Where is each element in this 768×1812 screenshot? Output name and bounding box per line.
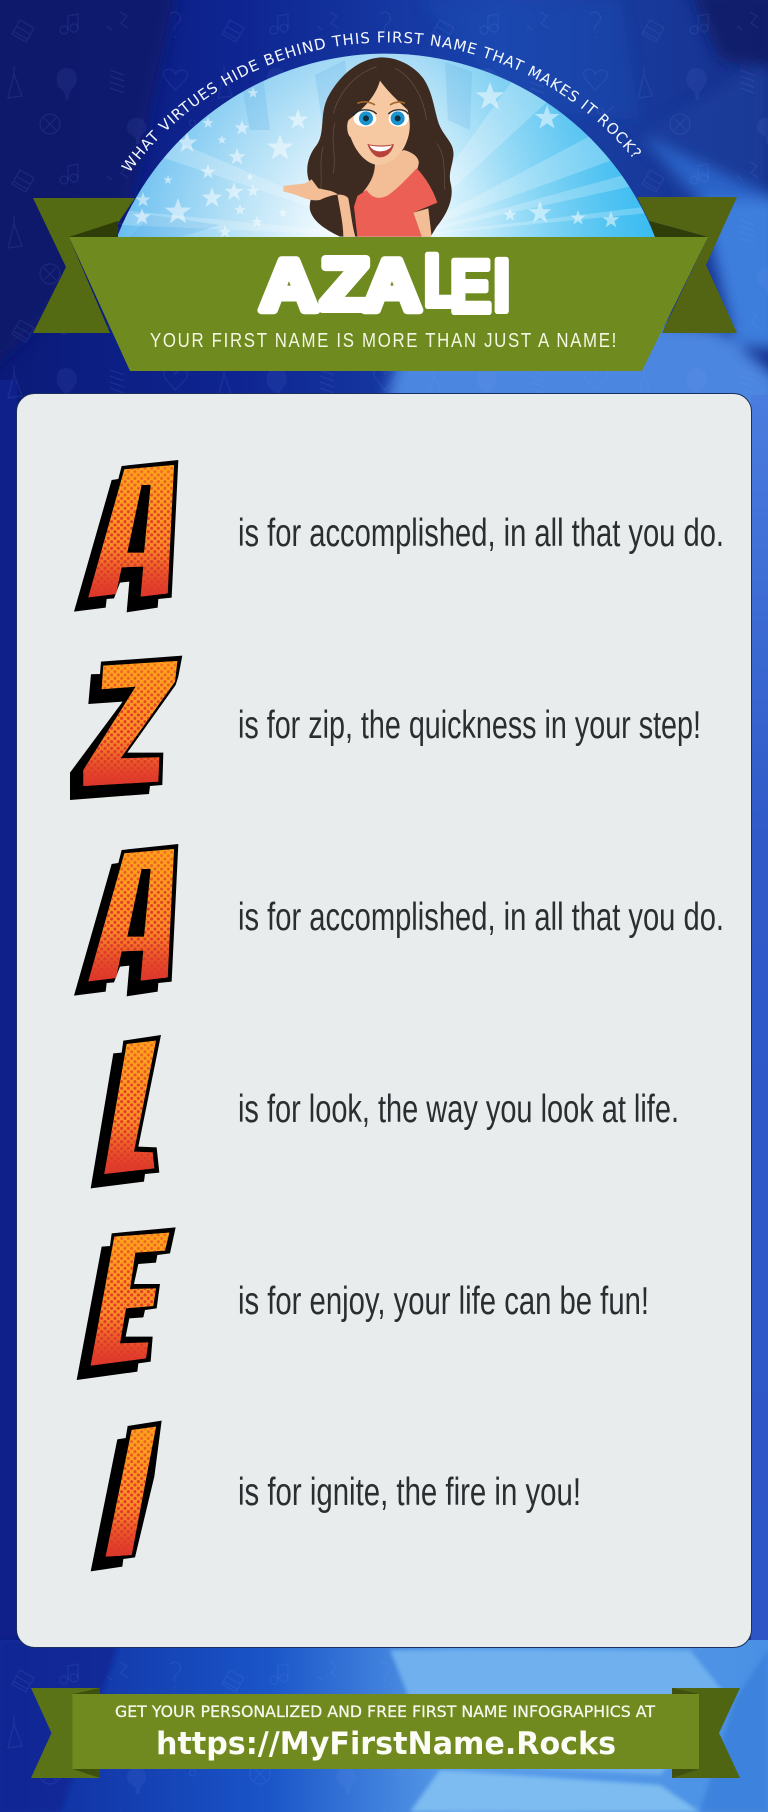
- name title: AZA: [260, 245, 421, 326]
- footer ribbon: [31, 1688, 740, 1778]
- footer url: https://MyFirstName.Rocks: [156, 1726, 616, 1762]
- arms: [283, 179, 355, 237]
- row A: accomplished: [74, 460, 724, 612]
- row I: ignite: [91, 1421, 581, 1571]
- right tail: [672, 1688, 740, 1778]
- name title: LEI: [423, 239, 510, 328]
- left ribbon tail: [33, 198, 135, 333]
- row E: enjoy: [77, 1227, 649, 1380]
- name title: [260, 239, 510, 328]
- subtitle: YOUR FIRST NAME IS MORE THAN JUST A NAME!: [150, 330, 618, 352]
- right ribbon tail: [637, 197, 737, 333]
- left tail: [31, 1688, 100, 1778]
- panel: letters card: [16, 394, 752, 1648]
- main ribbon: [33, 197, 737, 371]
- row L: look: [91, 1035, 679, 1188]
- comic letter I: [91, 1421, 162, 1571]
- comic letter E: [77, 1227, 176, 1380]
- neck and chest: [363, 150, 419, 201]
- comic letter A: [74, 844, 178, 996]
- character illustration: [283, 57, 454, 237]
- row Z: zip: [70, 656, 701, 800]
- comic letter Z: [70, 656, 182, 800]
- row A: accomplished: [74, 844, 724, 996]
- arched heading: WHAT VIRTUES HIDE BEHIND THIS FIRST NAME THAT MAKES IT ROCK?: [120, 31, 641, 171]
- footer call to action: GET YOUR PERSONALIZED AND FREE FIRST NAME INFOGRAPHICS AT: [115, 1702, 655, 1721]
- hair: [307, 57, 454, 237]
- eyes: [354, 111, 376, 127]
- row I: ignite: is for ignite, the fire in you!: [238, 1471, 581, 1514]
- comic letter L: [91, 1035, 161, 1188]
- mouth: [367, 144, 394, 157]
- face: [347, 81, 410, 165]
- dome with starburst: [117, 54, 660, 238]
- comic letter A: [74, 460, 178, 612]
- shirt: [354, 168, 437, 237]
